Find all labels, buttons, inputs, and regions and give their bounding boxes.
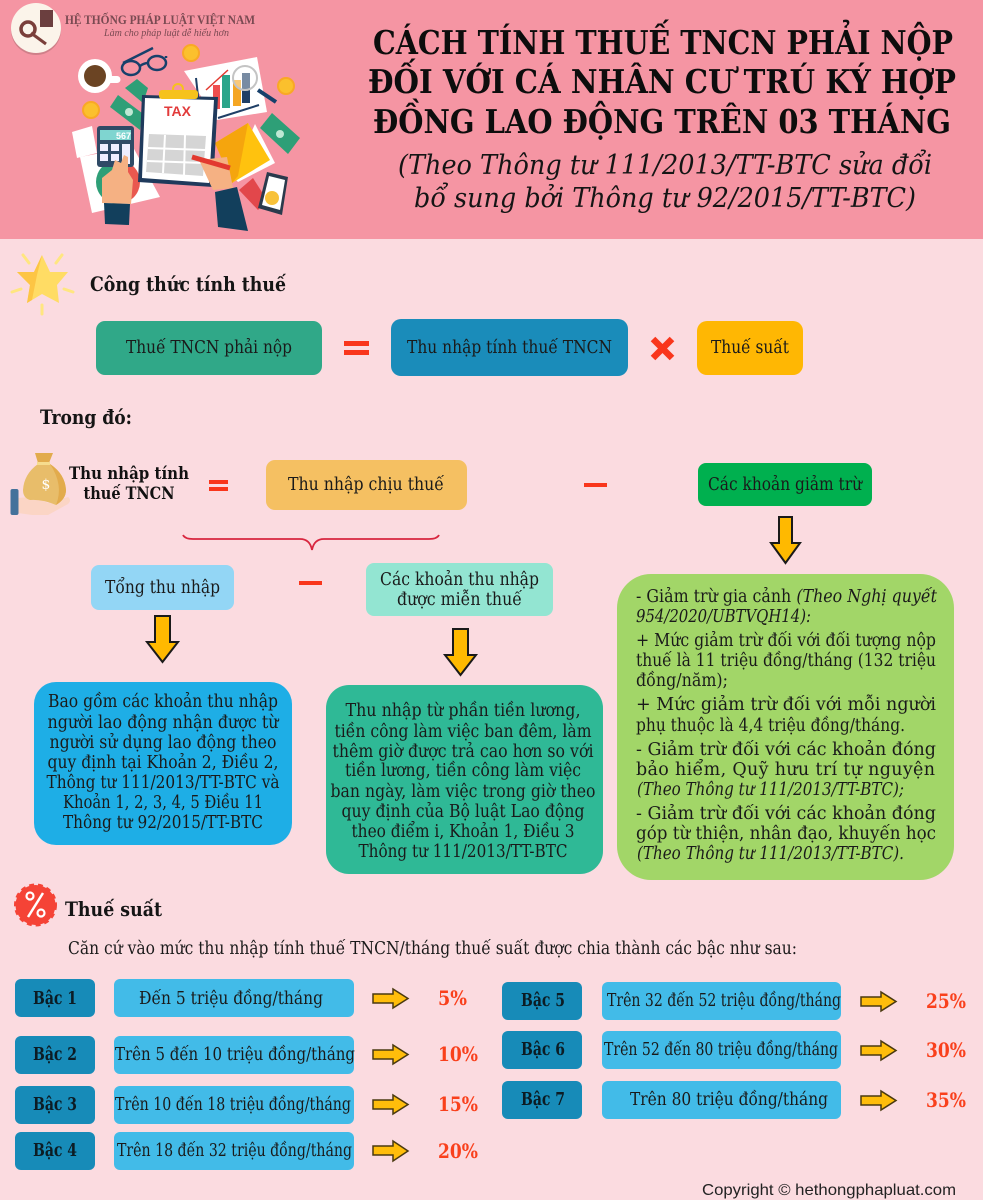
panel: total income detail: Khoản 1, 2, 3, 4, 5 Điều 11: [63, 793, 263, 813]
row: bậc 7: Bậc 7: [521, 1090, 565, 1110]
icon: star: [12, 255, 73, 314]
panel: deductions detail: phụ thuộc là 4,4 triệu đồng/tháng.: [636, 716, 905, 736]
row: bậc 4: Bậc 4: [33, 1141, 77, 1161]
row: bậc 1: 5%: [438, 986, 467, 1010]
heading: formula: Công thức tính thuế: [90, 272, 286, 296]
panel: deductions detail: - Giảm trừ gia cảnh (Theo Nghị quyết: [636, 587, 938, 607]
icon: clipboard: TAX: [164, 103, 192, 119]
subtitle: (Theo Thông tư 111/2013/TT-BTC sửa đổi: [398, 148, 932, 181]
tax illustration: [72, 45, 300, 231]
row: bậc 7: Trên 80 triệu đồng/tháng: [630, 1090, 828, 1110]
panel: deductions detail: thuế là 11 triệu đồng/tháng (132 triệu: [636, 651, 936, 671]
box: total income: [91, 565, 234, 610]
row: bậc 4: 20%: [438, 1139, 478, 1163]
copyright: Copyright © hethongphapluat.com: [702, 1182, 956, 1199]
row: bậc 3: 15%: [438, 1092, 478, 1116]
box: taxable income: [391, 319, 628, 376]
logo: [11, 3, 61, 55]
panel: total income detail: người sử dụng lao động theo: [50, 733, 276, 753]
icon: money bag in hand: $: [42, 477, 50, 493]
box: tax rate: [697, 321, 803, 375]
box: total income: Tổng thu nhập: [105, 578, 220, 598]
row: bậc 6: Bậc 6: [521, 1040, 565, 1060]
panel: deductions detail: đồng/năm);: [636, 671, 728, 691]
row: bậc 5: 25%: [926, 989, 966, 1013]
header band: [0, 0, 983, 239]
equals sign: [209, 480, 228, 491]
row: bậc 6: Trên 52 đến 80 triệu đồng/tháng: [604, 1040, 838, 1060]
panel: total income detail: người lao động nhận được từ: [48, 713, 280, 733]
brace: [183, 535, 439, 550]
box: assessable income: Thu nhập chịu thuế: [288, 475, 444, 495]
box: tax payable: [96, 321, 322, 375]
label: taxable income: Thu nhập tính: [69, 464, 189, 483]
icon: money bag in hand: [10, 453, 70, 515]
panel: total income detail: Thông tư 92/2015/TT-BTC: [63, 813, 263, 833]
icon: calculator: [97, 126, 134, 167]
equals sign: [344, 341, 369, 355]
icon: glasses: [122, 48, 166, 75]
row: bậc 6: 30%: [926, 1038, 966, 1062]
row: bậc 4: [15, 1132, 478, 1170]
icon: hands: [102, 155, 248, 231]
panel: total income detail: Thông tư 111/2013/TT-BTC và: [46, 773, 280, 793]
row: bậc 1: [15, 979, 467, 1017]
panel: deductions detail: góp từ thiện, nhân đạo, khuyến học: [636, 824, 936, 844]
organisation name: HỆ THỐNG PHÁP LUẬT VIỆT NAM: [65, 12, 255, 27]
panel: deductions detail: [617, 574, 954, 880]
panel: exempt income detail: quy định của Bộ luật Lao động: [342, 802, 584, 822]
panel: exempt income detail: Thu nhập từ phần tiền lương,: [346, 701, 580, 721]
icon: coins: [83, 45, 294, 118]
panel: deductions detail: - Giảm trừ đối với các khoản đóng: [636, 804, 936, 824]
arrow: to total income detail: [147, 616, 178, 662]
panel: exempt income detail: Thông tư 111/2013/TT-BTC: [358, 842, 568, 862]
box: tax payable: Thuế TNCN phải nộp: [126, 338, 292, 358]
box: assessable income: [266, 460, 467, 510]
organisation name: Làm cho pháp luật dễ hiểu hơn: [103, 28, 229, 39]
icon: percent badge: [15, 884, 56, 926]
row: bậc 2: Trên 5 đến 10 triệu đồng/tháng: [115, 1045, 355, 1065]
row: bậc 4: Trên 18 đến 32 triệu đồng/tháng: [117, 1141, 352, 1161]
icon: smartphone: [239, 172, 288, 215]
panel: deductions detail: bảo hiểm, Quỹ hưu trí tự nguyện: [636, 760, 935, 780]
minus sign: [299, 581, 322, 585]
box: taxable income: Thu nhập tính thuế TNCN: [407, 338, 612, 358]
box: deductions: [698, 463, 872, 506]
row: bậc 2: Bậc 2: [33, 1045, 77, 1065]
box: exempt income: được miễn thuế: [397, 590, 522, 610]
box: exempt income: Các khoản thu nhập: [380, 570, 539, 590]
icon: coffee cup: [78, 59, 120, 93]
multiply sign: [653, 339, 672, 358]
row: bậc 5: Trên 32 đến 52 triệu đồng/tháng: [607, 991, 841, 1011]
panel: total income detail: [34, 682, 292, 845]
row: bậc 2: [15, 1036, 478, 1074]
panel: exempt income detail: thêm giờ được trả cao hơn so với: [332, 742, 594, 762]
row: bậc 5: Bậc 5: [521, 991, 565, 1011]
icon: clipboard: [138, 84, 218, 187]
box: exempt income: [366, 563, 553, 616]
intro sentence: Căn cứ vào mức thu nhập tính thuế TNCN/tháng thuế suất được chia thành các bậc như sau:: [68, 939, 797, 959]
panel: exempt income detail: ban ngày, làm việc trong giờ theo: [330, 782, 596, 802]
row: bậc 3: [15, 1086, 478, 1124]
icon: envelope: [215, 123, 275, 183]
panel: exempt income detail: tiền lương, tiền công làm việc: [345, 761, 581, 781]
arrow: to exempt income detail: [445, 629, 476, 675]
row: bậc 7: 35%: [926, 1088, 966, 1112]
panel: total income detail: quy định tại Khoản 2, Điều 2,: [48, 753, 278, 773]
subtitle: bổ sung bởi Thông tư 92/2015/TT-BTC): [414, 181, 916, 214]
panel: total income detail: Bao gồm các khoản thu nhập: [48, 692, 278, 712]
organisation name: [65, 12, 255, 39]
row: bậc 1: Bậc 1: [33, 989, 77, 1009]
label: taxable income: [69, 464, 189, 503]
heading: tax rate: Thuế suất: [65, 897, 163, 921]
box: deductions: Các khoản giảm trừ: [708, 475, 864, 495]
row: bậc 7: [502, 1081, 966, 1119]
icon: bar chart paper: [184, 57, 276, 120]
panel: deductions detail: + Mức giảm trừ đối với đối tượng nộp: [636, 631, 936, 651]
label: taxable income: thuế TNCN: [84, 484, 174, 503]
row: bậc 6: [502, 1031, 966, 1069]
panel: exempt income detail: theo điểm i, Khoản 1, Điều 3: [352, 822, 574, 842]
icon: calculator: 567: [116, 131, 131, 141]
arrow: to deductions detail: [771, 517, 800, 563]
panel: deductions detail: + Mức giảm trừ đối với mỗi người: [636, 695, 936, 715]
heading: where: Trong đó:: [40, 405, 132, 429]
row: bậc 3: Trên 10 đến 18 triệu đồng/tháng: [115, 1095, 351, 1115]
row: bậc 3: Bậc 3: [33, 1095, 77, 1115]
row: bậc 5: [502, 982, 966, 1020]
title: [368, 18, 956, 141]
panel: exempt income detail: tiền công làm việc ban đêm, làm: [334, 722, 592, 742]
panel: deductions detail: 954/2020/UBTVQH14):: [636, 607, 811, 627]
box: tax rate: Thuế suất: [711, 338, 789, 358]
panel: exempt income detail: [326, 685, 603, 874]
subtitle: [398, 148, 932, 214]
panel: deductions detail: (Theo Thông tư 111/2013/TT-BTC).: [637, 844, 904, 864]
row: bậc 2: 10%: [438, 1042, 478, 1066]
panel: deductions detail: (Theo Thông tư 111/2013/TT-BTC);: [637, 780, 904, 800]
minus sign: [584, 483, 607, 487]
row: bậc 1: Đến 5 triệu đồng/tháng: [139, 989, 323, 1009]
icon: banknotes: [110, 79, 300, 154]
icon: receipt and pie paper: [72, 126, 160, 213]
panel: deductions detail: - Giảm trừ đối với các khoản đóng: [636, 740, 936, 760]
